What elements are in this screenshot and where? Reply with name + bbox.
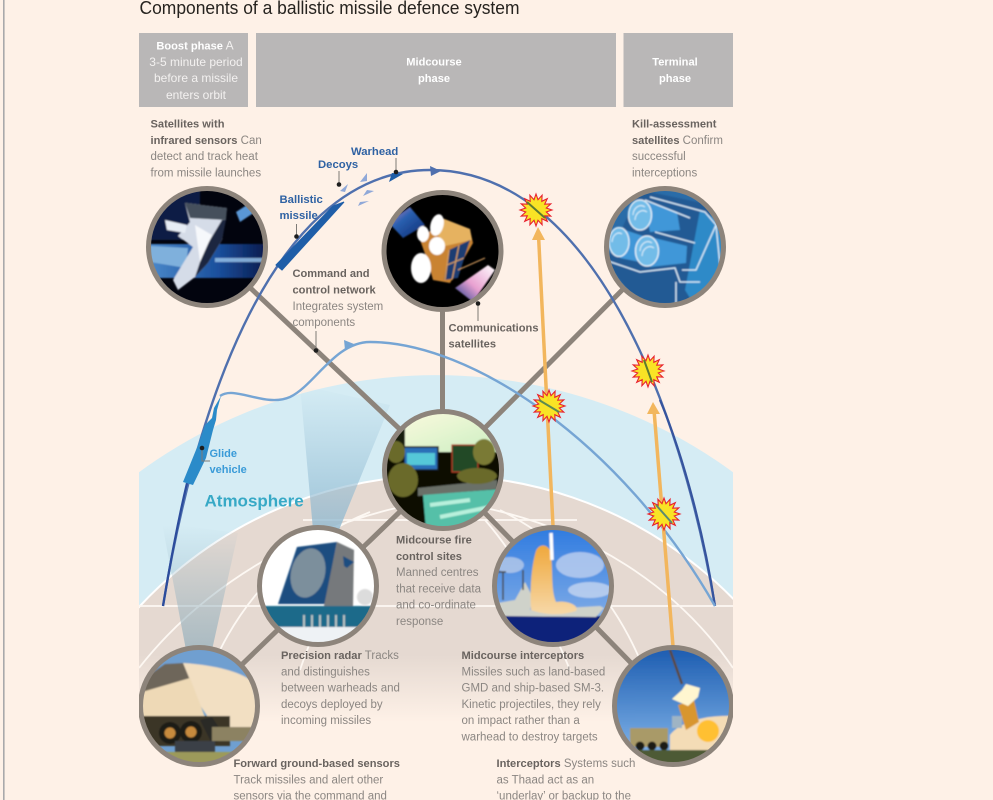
panel: boost phase <box>139 33 248 107</box>
radar beam: forward sensors <box>166 537 236 646</box>
label: interceptors: Interceptors <box>496 758 561 770</box>
interceptor arrow: terminal <box>647 402 673 646</box>
leader: glide <box>200 446 210 461</box>
connector network <box>241 287 632 666</box>
label: midcourse interceptors: GMD and ship-based SM-3. <box>462 683 604 695</box>
interception burst 3 <box>533 390 565 422</box>
photo: midcourse fire control site <box>384 412 502 530</box>
label: precision radar: and distinguishes <box>281 666 370 678</box>
ballistic missile trajectory <box>163 170 715 606</box>
leader: ballistic missile <box>294 224 299 239</box>
photo: midcourse interceptor <box>494 528 612 648</box>
photo: forward ground-based sensor <box>140 648 260 764</box>
glide direction arrow <box>344 340 354 348</box>
panel: boost phase: 3-5 minute period <box>149 55 243 69</box>
label: glide vehicle: vehicle <box>210 464 247 476</box>
label: midcourse fire control sites: response <box>396 616 443 628</box>
label: midcourse interceptors: on impact rather than a <box>462 715 580 727</box>
photo: terminal interceptor <box>614 648 733 765</box>
right trajectory dark segment <box>660 400 715 606</box>
panel: midcourse phase <box>256 33 616 107</box>
label: glide vehicle: Glide <box>210 448 237 460</box>
label: precision radar: incoming missiles <box>281 715 371 727</box>
panel: terminal phase <box>624 33 733 107</box>
label: satellites with infrared sensors: Satellites with <box>150 118 225 130</box>
label: midcourse interceptors: Missiles such as land-based <box>462 666 605 678</box>
label: precision radar: between warheads and <box>281 683 400 695</box>
icon: ballistic missile <box>276 202 344 270</box>
label: ballistic missile: missile <box>280 210 318 222</box>
label: kill-assessment satellites: successful <box>632 151 686 163</box>
label: midcourse fire control sites: that receive data <box>396 583 482 595</box>
label: midcourse interceptors: warhead to destroy targets <box>460 732 598 744</box>
label: command and control network: Command and <box>292 268 370 280</box>
label: midcourse fire control sites: control sites <box>396 551 462 563</box>
leader: command network <box>314 331 318 353</box>
label: atmosphere: Atmosphere <box>204 492 304 510</box>
label: satellites with infrared sensors: from missile launches <box>150 167 261 179</box>
interception burst 4 <box>648 498 680 530</box>
label: midcourse interceptors: Kinetic projectiles, they rely <box>462 699 601 711</box>
photo: infrared satellite <box>148 188 266 306</box>
label: kill-assessment satellites: Confirm <box>679 135 723 147</box>
leader: warhead <box>394 158 398 174</box>
diagram <box>139 158 733 767</box>
interceptor arrow: midcourse <box>532 227 553 526</box>
label: precision radar: decoys deployed by <box>281 699 383 711</box>
label: satellites with infrared sensors: Can <box>237 135 262 147</box>
glide vehicle trajectory <box>220 342 715 606</box>
label: forward ground-based sensors: Forward ground-based sensors <box>234 758 400 770</box>
label: kill-assessment satellites: interceptions <box>632 167 697 179</box>
panel: boost phase: Boost phase A <box>156 38 234 52</box>
atmosphere band <box>139 375 733 605</box>
leader: comms <box>476 301 480 321</box>
radar beam: precision radar <box>302 406 389 529</box>
panel: midcourse phase: phase <box>418 73 450 85</box>
label: kill-assessment satellites: Kill-assessment <box>632 118 717 130</box>
label: command and control network: control network <box>292 284 377 296</box>
lower ballistic trajectory dark segment <box>163 483 187 606</box>
icon: decoys <box>340 173 374 206</box>
label: interceptors: as Thaad act as an <box>496 774 594 786</box>
icon: warhead <box>389 173 403 182</box>
interception burst 2 <box>632 355 664 387</box>
panel: boost phase: before a missile <box>154 71 238 85</box>
photo: precision radar <box>260 528 378 647</box>
label: satellites with infrared sensors: detect and track heat <box>150 151 259 163</box>
panel: midcourse phase: Midcourse <box>406 56 462 68</box>
label: decoys: Decoys <box>318 159 358 171</box>
trajectory direction arrow <box>430 166 441 176</box>
label: midcourse interceptors: Midcourse interceptors <box>462 650 584 662</box>
icon: glide vehicle <box>183 396 221 485</box>
label: midcourse fire control sites: Midcourse fire <box>396 534 472 546</box>
label: midcourse fire control sites: and co-ordinate <box>396 600 476 612</box>
label: interceptors: Systems such <box>561 758 635 770</box>
page edge rule <box>3 0 5 800</box>
label: communications satellites: Communications <box>448 322 538 334</box>
photo: communications satellite <box>384 192 501 310</box>
panel: terminal phase: phase <box>659 73 691 85</box>
label: command and control network: Integrates system <box>292 301 383 313</box>
leader: decoys <box>337 171 341 187</box>
label: kill-assessment satellites: satellites <box>632 135 679 147</box>
earth globe <box>139 478 733 740</box>
label: satellites with infrared sensors: infrared sensors <box>150 135 237 147</box>
photo: kill-assessment satellite <box>605 188 728 306</box>
label: warhead: Warhead <box>351 146 398 158</box>
label: ballistic missile: Ballistic <box>280 194 323 206</box>
label: communications satellites: satellites <box>448 338 496 350</box>
label: precision radar: Tracks <box>362 650 399 662</box>
panel: boost phase: enters orbit <box>166 88 227 102</box>
label: forward ground-based sensors: Track missiles and alert other <box>234 774 383 786</box>
interception burst 1 <box>520 194 552 226</box>
label: precision radar: Precision radar <box>281 650 362 662</box>
label: command and control network: components <box>292 317 355 329</box>
panel: terminal phase: Terminal <box>652 56 698 68</box>
label: midcourse fire control sites: Manned centres <box>396 567 479 579</box>
